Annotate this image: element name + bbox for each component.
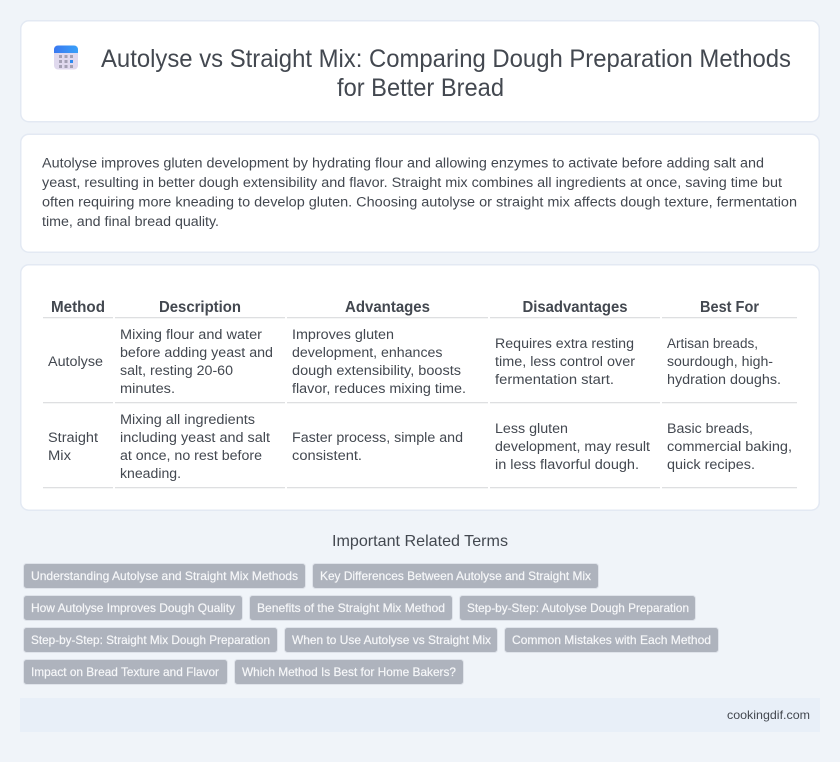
table header: Disadvantages (522, 299, 628, 316)
related term tags: Which Method Is Best for Home Bakers? (242, 665, 456, 679)
table row: autolyse (48, 327, 781, 397)
table row: straight mix: Faster process, simple and (292, 430, 463, 446)
related term tags (24, 564, 718, 684)
related term tags: Impact on Bread Texture and Flavor (31, 665, 219, 679)
table row: autolyse: Requires extra resting (495, 336, 634, 352)
table row: straight mix: development, may result (495, 439, 650, 455)
table row: straight mix: quick recipes. (667, 457, 755, 473)
table header (51, 299, 759, 316)
related term tags: Common Mistakes with Each Method (512, 633, 711, 647)
table row: straight mix: kneading. (120, 466, 181, 482)
table row: straight mix: at once, no rest before (120, 448, 262, 464)
related terms heading: Important Related Terms (332, 533, 508, 550)
table row: straight mix: including yeast and salt (120, 430, 270, 446)
intro text: Autolyse improves gluten development by hydrating flour and allowing enzymes to activate before adding salt and (42, 156, 764, 172)
intro text (42, 156, 797, 230)
title: Autolyse vs Straight Mix: Comparing Dough Preparation Methods (101, 45, 791, 73)
table row: straight mix: Mixing all ingredients (120, 412, 255, 428)
related term tags: How Autolyse Improves Dough Quality (31, 601, 235, 615)
table header: Best For (700, 299, 759, 316)
table row: straight mix: commercial baking, (667, 439, 792, 455)
table row: autolyse: sourdough, high- (667, 354, 773, 370)
table row: autolyse: hydration doughs. (667, 372, 781, 388)
related term tags: Key Differences Between Autolyse and Straight Mix (320, 569, 591, 583)
intro text: time, and final bread quality. (42, 214, 219, 230)
related term tags: Understanding Autolyse and Straight Mix Methods (31, 569, 298, 583)
related term tags: Step-by-Step: Straight Mix Dough Preparation (31, 633, 270, 647)
title (101, 45, 791, 102)
table panel (21, 265, 819, 510)
table row: straight mix: Mix (48, 448, 71, 464)
table row: autolyse: before adding yeast and (120, 345, 273, 361)
related term tags: Benefits of the Straight Mix Method (257, 601, 445, 615)
table row: autolyse: flavor, reduces mixing time. (292, 381, 466, 397)
table row: autolyse: salt, resting 20-60 (120, 363, 233, 379)
table row: autolyse: fermentation start. (495, 372, 614, 388)
table row: straight mix: Less gluten (495, 421, 568, 437)
table row: autolyse: minutes. (120, 381, 175, 397)
intro panel (21, 134, 819, 252)
table row: straight mix: consistent. (292, 448, 362, 464)
footer: cookingdif.com (727, 708, 810, 722)
table header: Method (51, 299, 105, 316)
table header: Description (159, 299, 241, 316)
table row: straight mix: in less flavorful dough. (495, 457, 639, 473)
table row: straight mix (48, 412, 792, 482)
table row: autolyse: Improves gluten (292, 327, 394, 343)
table row: autolyse: Autolyse (48, 354, 103, 370)
footer (20, 698, 820, 732)
table row: autolyse: time, less control over (495, 354, 635, 370)
table row: straight mix: Basic breads, (667, 421, 753, 437)
table row: autolyse: development, enhances (292, 345, 442, 361)
related term tags: Step-by-Step: Autolyse Dough Preparation (467, 601, 689, 615)
table header: Advantages (345, 299, 430, 316)
intro text: often requiring more kneading to develop gluten. Choosing autolyse or straight mix affects dough texture, fermentation (42, 194, 797, 210)
icon: calendar (54, 46, 78, 70)
intro text: yeast, resulting in better dough extensibility and flavor. Straight mix combines all ingredients at once, saving time but (42, 175, 782, 191)
table row: autolyse: Artisan breads, (667, 336, 758, 352)
table row: autolyse: dough extensibility, boosts (292, 363, 461, 379)
table row: autolyse: Mixing flour and water (120, 327, 262, 343)
header panel (21, 21, 819, 122)
title: for Better Bread (337, 74, 504, 102)
table row: straight mix: Straight (48, 430, 98, 446)
related term tags: When to Use Autolyse vs Straight Mix (292, 633, 491, 647)
